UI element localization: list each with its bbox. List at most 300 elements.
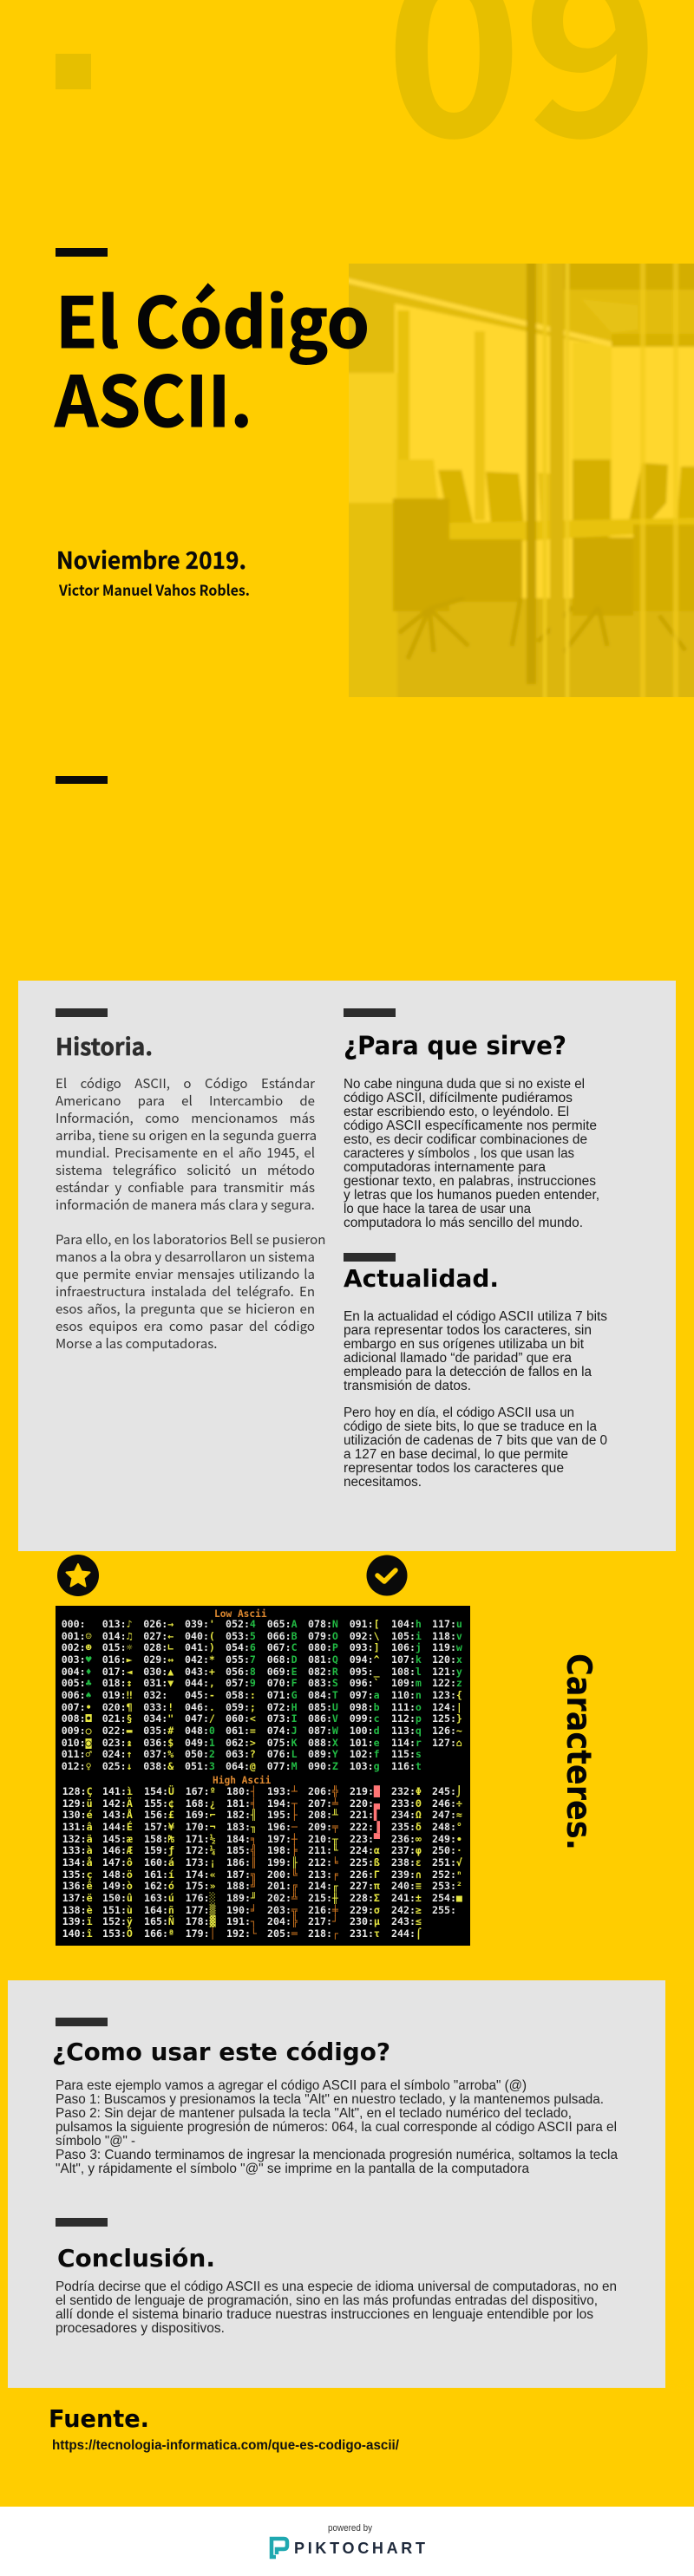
- text: actualidad: empleado para la detección de fallos en la: [344, 1365, 592, 1379]
- high ascii columns: 180:┤: [226, 1785, 257, 1797]
- high ascii columns: 156:£: [144, 1809, 174, 1821]
- high ascii columns: 241:±: [391, 1892, 422, 1904]
- high ascii columns: 220:▄: [350, 1797, 380, 1810]
- high ascii columns: 242:≥: [391, 1904, 422, 1916]
- text: para que sirve: esto, es decir codificar combinaciones de: [344, 1132, 587, 1147]
- low ascii columns: 100:d: [350, 1725, 380, 1737]
- low ascii columns: 125:}: [432, 1712, 462, 1725]
- heading: como usar: ¿Como usar este código?: [52, 2038, 390, 2066]
- high ascii columns: 151:ù: [102, 1904, 133, 1916]
- high ascii columns: 240:≡: [391, 1880, 422, 1892]
- low ascii columns: 096:`: [350, 1677, 380, 1689]
- text: historia: estándar y confiable para transmitir más: [56, 1178, 315, 1197]
- high ascii columns: 226:Γ: [350, 1868, 380, 1881]
- low ascii columns: 106:j: [391, 1641, 422, 1653]
- text: actualidad: código de siete bits, lo que se traduce en la: [344, 1419, 597, 1434]
- high ascii columns: 246:÷: [432, 1797, 462, 1810]
- low ascii columns: 102:f: [350, 1748, 380, 1760]
- text: como usar: símbolo "@" -: [56, 2134, 135, 2149]
- high ascii columns: 218:┌: [308, 1927, 338, 1940]
- low ascii columns: 108:l: [391, 1666, 422, 1678]
- text: historia: Americano para el Intercambio de: [56, 1092, 315, 1110]
- text: como usar: pulsamos la siguiente progresión de números: 064, la cual corresponde al código ASCII para el: [56, 2120, 617, 2135]
- heading: historia: Historia.: [56, 1028, 153, 1062]
- high ascii columns: 183:╖: [226, 1821, 257, 1833]
- conclusion bar: [56, 2218, 108, 2227]
- high ascii columns: 198:╞: [267, 1844, 298, 1856]
- text: para que sirve: código ASCII específicamente nos permite: [344, 1118, 597, 1133]
- high ascii columns: 160:á: [144, 1856, 174, 1868]
- low ascii columns: 041:): [185, 1641, 215, 1653]
- high ascii columns: 175:»: [186, 1880, 216, 1892]
- high ascii columns: 179:│: [186, 1927, 216, 1940]
- low ascii columns: 073:I: [267, 1712, 298, 1725]
- text: como usar: "Alt", y rápidamente el símbolo "@" se imprime en la pantalla de la computadora: [56, 2162, 529, 2176]
- low ascii columns: 057:9: [226, 1677, 256, 1689]
- high ascii columns: 225:ß: [350, 1856, 380, 1868]
- high ascii columns: 153:Ö: [102, 1927, 133, 1940]
- high ascii columns: 177:▒: [186, 1904, 216, 1916]
- high ascii columns: 244:⌠: [391, 1927, 422, 1940]
- text: como usar: Para este ejemplo vamos a agregar el código ASCII para el símbolo "arroba" (@): [56, 2078, 527, 2093]
- high ascii columns: 190:╛: [226, 1904, 257, 1916]
- low ascii columns: 026:→: [143, 1618, 174, 1630]
- low ascii columns: 012:♀: [62, 1760, 92, 1772]
- high ascii columns: 202:╩: [267, 1892, 298, 1904]
- low ascii columns: 051:3: [185, 1760, 215, 1772]
- low ascii columns: 008:◘: [62, 1712, 92, 1725]
- text: como usar: Paso 2: Sin dejar de mantener pulsada la tecla "Alt", en el teclado numérico del teclado,: [56, 2106, 572, 2121]
- icon: check: [366, 1555, 408, 1595]
- title: [54, 268, 370, 447]
- high ascii columns: 247:≈: [432, 1809, 462, 1821]
- low ascii columns: 010:◙: [62, 1737, 92, 1749]
- high ascii columns: 136:ê: [62, 1880, 93, 1892]
- high ascii columns: 181:╡: [226, 1797, 257, 1810]
- high ascii columns: 234:Ω: [391, 1809, 422, 1821]
- low ascii columns: 115:s: [391, 1748, 422, 1760]
- high ascii columns: 163:ú: [144, 1892, 174, 1904]
- high ascii columns: 171:½: [186, 1833, 216, 1845]
- low ascii columns: 118:v: [432, 1630, 462, 1642]
- high ascii columns: 228:Σ: [350, 1892, 380, 1904]
- low ascii columns: 004:♦: [62, 1666, 92, 1678]
- low ascii columns: 098:b: [350, 1701, 380, 1713]
- high ascii columns: 187:╗: [226, 1868, 257, 1881]
- high ascii columns: 204:╠: [267, 1915, 298, 1927]
- low ascii columns: 066:B: [267, 1630, 298, 1642]
- low ascii columns: 062:>: [226, 1737, 256, 1749]
- text: historia: esos años, la pregunta que se hicieron en: [56, 1300, 315, 1318]
- high ascii columns: 188:╝: [226, 1880, 257, 1892]
- low ascii columns: 122:z: [432, 1677, 462, 1689]
- high ascii columns: 192:└: [226, 1927, 257, 1940]
- low ascii columns: 029:↔: [143, 1653, 174, 1666]
- high ascii columns: 184:╕: [226, 1833, 257, 1845]
- high ascii columns: 232:Φ: [391, 1785, 422, 1797]
- high ascii columns: 237:φ: [391, 1844, 422, 1856]
- low ascii columns: 104:h: [391, 1618, 422, 1630]
- author: Victor Manuel Vahos Robles.: [58, 578, 250, 600]
- high ascii columns: 143:Å: [102, 1809, 133, 1821]
- high ascii columns: 139:ï: [62, 1915, 93, 1927]
- high ascii columns: 207:╧: [308, 1797, 338, 1810]
- low ascii columns: 063:?: [226, 1748, 256, 1760]
- low ascii label: Low Ascii: [214, 1608, 267, 1620]
- high ascii columns: 174:«: [186, 1868, 216, 1881]
- high ascii columns: 233:Θ: [391, 1797, 422, 1810]
- high ascii columns: 229:σ: [350, 1904, 380, 1916]
- high ascii columns: 182:╢: [226, 1809, 257, 1821]
- high ascii columns: 248:°: [432, 1821, 462, 1833]
- low ascii columns: [62, 1618, 462, 1772]
- low ascii columns: 024:↑: [102, 1748, 133, 1760]
- low ascii columns: 027:←: [143, 1630, 174, 1642]
- high ascii columns: 155:¢: [144, 1797, 174, 1810]
- low ascii columns: 005:♣: [62, 1677, 92, 1689]
- high ascii columns: 249:∙: [432, 1833, 462, 1845]
- low ascii columns: 023:↨: [102, 1737, 133, 1749]
- text: para que sirve: caracteres y símbolos , los que usan las: [344, 1146, 574, 1161]
- low ascii columns: 076:L: [267, 1748, 298, 1760]
- high ascii columns: 140:î: [62, 1927, 93, 1940]
- high ascii columns: 141:ì: [102, 1785, 133, 1797]
- low ascii columns: 097:a: [350, 1689, 380, 1701]
- high ascii columns: 165:Ñ: [144, 1915, 174, 1927]
- text: actualidad: embargo en sus orígenes utilizaba un bit: [344, 1337, 585, 1352]
- high ascii columns: 215:╫: [308, 1892, 338, 1904]
- low ascii columns: 056:8: [226, 1666, 256, 1678]
- low ascii columns: 126:~: [432, 1725, 462, 1737]
- high ascii columns: 208:╨: [308, 1809, 338, 1821]
- low ascii columns: 022:▬: [102, 1725, 133, 1737]
- powered by label: powered by: [328, 2523, 372, 2534]
- high ascii columns: 178:▓: [186, 1915, 216, 1927]
- low ascii columns: 110:n: [391, 1689, 422, 1701]
- low ascii columns: 003:♥: [62, 1653, 92, 1666]
- low ascii columns: 109:m: [391, 1677, 422, 1689]
- high ascii columns: 158:₧: [144, 1833, 174, 1845]
- high ascii columns: 135:ç: [62, 1868, 93, 1881]
- low ascii columns: 089:Y: [308, 1748, 338, 1760]
- high ascii columns: 239:∩: [391, 1868, 422, 1881]
- low ascii columns: 038:&: [143, 1760, 174, 1772]
- title: ASCII.: [54, 347, 252, 447]
- low ascii columns: 103:g: [350, 1760, 380, 1772]
- high ascii columns: 230:µ: [350, 1915, 380, 1927]
- text: como usar: Paso 1: Buscamos y presionamos la tecla "Alt" en nuestro teclado, y la mantenemos pulsada.: [56, 2092, 604, 2107]
- text: historia: sistema telegráfico solicitó un método: [56, 1161, 315, 1179]
- low ascii columns: 001:☺: [62, 1630, 92, 1642]
- low ascii columns: 049:1: [185, 1737, 215, 1749]
- high ascii columns: 245:⌡: [432, 1785, 462, 1797]
- high ascii columns: 172:¼: [186, 1844, 216, 1856]
- high ascii columns: 147:ô: [102, 1856, 133, 1868]
- footer band: [0, 2507, 694, 2576]
- para que sirve bar: [344, 1008, 396, 1017]
- low ascii columns: 059:;: [226, 1701, 256, 1713]
- low ascii columns: 021:§: [102, 1712, 133, 1725]
- high ascii columns: 222:▐: [350, 1821, 380, 1833]
- low ascii columns: 007:•: [62, 1701, 92, 1713]
- low ascii columns: 119:w: [432, 1641, 462, 1653]
- text: historia: manos a la obra y desarrollaron un sistema: [56, 1248, 315, 1266]
- text: actualidad: utilización de cadenas de 7 bits que van de 0: [344, 1433, 607, 1448]
- como usar bar: [56, 2018, 108, 2026]
- high ascii columns: 221:▌: [350, 1809, 380, 1821]
- low ascii columns: 085:U: [308, 1701, 338, 1713]
- low ascii columns: 015:☼: [102, 1641, 133, 1653]
- high ascii columns: 250:·: [432, 1844, 462, 1856]
- low ascii columns: 079:O: [308, 1630, 338, 1642]
- heading: fuente: Fuente.: [49, 2404, 149, 2433]
- high ascii columns: 223:▀: [350, 1833, 380, 1845]
- heading: conclusion: Conclusión.: [57, 2244, 215, 2273]
- source url: https://tecnologia-informatica.com/que-es-codigo-ascii/: [52, 2438, 400, 2453]
- text: historia: [56, 1074, 325, 1353]
- high ascii columns: 132:ä: [62, 1833, 93, 1845]
- text: actualidad: adicional llamado “de paridad” que era: [344, 1351, 572, 1366]
- text: como usar: [56, 2078, 618, 2176]
- high ascii columns: 146:Æ: [102, 1844, 133, 1856]
- low ascii columns: 090:Z: [308, 1760, 338, 1772]
- high ascii columns: 252:ⁿ: [432, 1868, 462, 1881]
- title: El Código: [56, 268, 370, 368]
- low ascii columns: 093:]: [350, 1641, 380, 1653]
- high ascii columns: 200:╚: [267, 1868, 298, 1881]
- high ascii columns: 199:╟: [267, 1856, 298, 1868]
- low ascii columns: 044:,: [185, 1677, 215, 1689]
- text: actualidad: a 127 en base decimal, lo que permite: [344, 1447, 568, 1462]
- text: conclusion: procesadores y dispositivos.: [56, 2321, 225, 2336]
- high ascii columns: 195:├: [267, 1809, 298, 1821]
- high ascii columns: 224:α: [350, 1844, 380, 1856]
- high ascii columns: 216:╪: [308, 1904, 338, 1916]
- low ascii columns: 094:^: [350, 1653, 380, 1666]
- low ascii columns: 019:‼: [102, 1689, 133, 1701]
- text: para que sirve: No cabe ninguna duda que si no existe el: [344, 1077, 585, 1092]
- high ascii columns: 152:ÿ: [102, 1915, 133, 1927]
- low ascii columns: 091:[: [350, 1618, 380, 1630]
- high ascii columns: 255:: [432, 1904, 456, 1916]
- high ascii columns: 129:ü: [62, 1797, 93, 1810]
- low ascii columns: 040:(: [185, 1630, 215, 1642]
- high ascii columns: 150:û: [102, 1892, 133, 1904]
- low ascii columns: 105:i: [391, 1630, 422, 1642]
- text: para que sirve: código ASCII, difícilmente pudiéramos: [344, 1091, 573, 1105]
- high ascii columns: 166:ª: [144, 1927, 174, 1940]
- text: para que sirve: y letras que los humanos pueden entender,: [344, 1188, 599, 1203]
- high ascii columns: 189:╜: [226, 1892, 257, 1904]
- low ascii columns: 095:_: [350, 1666, 380, 1678]
- text: historia: Información, como mencionamos más: [56, 1109, 315, 1127]
- high ascii columns: 209:╤: [308, 1821, 338, 1833]
- text: actualidad: representar todos los caracteres que: [344, 1461, 564, 1476]
- high ascii columns: 201:╔: [267, 1880, 298, 1892]
- low ascii columns: 031:▼: [143, 1677, 174, 1689]
- text: conclusion: Podría decirse que el código ASCII es una especie de idioma universal de computadoras, no en: [56, 2279, 617, 2294]
- high ascii columns: 194:┬: [267, 1797, 298, 1810]
- low ascii columns: 099:c: [350, 1712, 380, 1725]
- high ascii columns: 157:¥: [144, 1821, 174, 1833]
- low ascii columns: 052:4: [226, 1618, 256, 1630]
- text: actualidad: Pero hoy en día, el código ASCII usa un: [344, 1405, 574, 1420]
- low ascii columns: 092:\: [350, 1630, 380, 1642]
- low ascii columns: 084:T: [308, 1689, 338, 1701]
- low ascii columns: 033:!: [143, 1701, 174, 1713]
- low ascii columns: 123:{: [432, 1689, 462, 1701]
- text: para que sirve: [344, 1077, 599, 1230]
- high ascii columns: 212:╘: [308, 1856, 338, 1868]
- high ascii columns: 231:τ: [350, 1927, 380, 1940]
- low ascii columns: 011:♂: [62, 1748, 92, 1760]
- low ascii columns: 120:x: [432, 1653, 462, 1666]
- high ascii columns: 167:º: [186, 1785, 216, 1797]
- low ascii columns: 013:♪: [102, 1618, 133, 1630]
- panel: historia y para que sirve: [18, 981, 676, 1551]
- low ascii columns: 114:r: [391, 1737, 422, 1749]
- low ascii columns: 050:2: [185, 1748, 215, 1760]
- high ascii columns: 196:─: [267, 1821, 298, 1833]
- low ascii columns: 018:↕: [102, 1677, 133, 1689]
- high ascii columns: 170:¬: [186, 1821, 216, 1833]
- text: historia: que permite enviar mensajes utilizando la: [56, 1265, 315, 1283]
- icon: star: [57, 1555, 99, 1596]
- high ascii columns: 145:æ: [102, 1833, 133, 1845]
- low ascii columns: 017:◄: [102, 1666, 133, 1678]
- text: historia: mundial. Precisamente en el año 1945, el: [56, 1144, 315, 1162]
- low ascii columns: 124:|: [432, 1701, 462, 1713]
- low ascii columns: 111:o: [391, 1701, 422, 1713]
- text: actualidad: para representar todos los caracteres, sin: [344, 1323, 592, 1338]
- high ascii columns: 243:≤: [391, 1915, 422, 1927]
- low ascii columns: 016:►: [102, 1653, 133, 1666]
- high ascii columns: 186:║: [226, 1856, 257, 1868]
- low ascii columns: 036:$: [143, 1737, 174, 1749]
- low ascii columns: 009:○: [62, 1725, 92, 1737]
- low ascii columns: 060:<: [226, 1712, 256, 1725]
- low ascii columns: 067:C: [267, 1641, 298, 1653]
- high ascii columns: 162:ó: [144, 1880, 174, 1892]
- low ascii columns: 107:k: [391, 1653, 422, 1666]
- low ascii columns: 116:t: [391, 1760, 422, 1772]
- high ascii columns: 144:É: [102, 1821, 133, 1833]
- low ascii columns: 078:N: [308, 1618, 338, 1630]
- low ascii columns: 072:H: [267, 1701, 298, 1713]
- high ascii columns: 164:ñ: [144, 1904, 174, 1916]
- low ascii columns: 042:*: [185, 1653, 215, 1666]
- low ascii columns: 113:q: [391, 1725, 422, 1737]
- low ascii columns: 083:S: [308, 1677, 338, 1689]
- low ascii columns: 069:E: [267, 1666, 298, 1678]
- text: actualidad: necesitamos.: [344, 1475, 422, 1490]
- high ascii columns: 197:┼: [267, 1833, 298, 1845]
- high ascii columns: 131:â: [62, 1821, 93, 1833]
- text: para que sirve: lo que hace la tarea de usar una: [344, 1202, 531, 1216]
- low ascii columns: 071:G: [267, 1689, 298, 1701]
- low ascii columns: 037:%: [143, 1748, 174, 1760]
- low ascii columns: 006:♠: [62, 1689, 92, 1701]
- low ascii columns: 032:: [143, 1689, 167, 1701]
- text: historia: infraestructura instalada del telégrafo. En: [56, 1282, 315, 1301]
- low ascii columns: 025:↓: [102, 1760, 133, 1772]
- text: historia: información de manera más clara y segura.: [56, 1196, 315, 1214]
- high ascii columns: 227:π: [350, 1880, 380, 1892]
- historia bar: [56, 1008, 108, 1017]
- low ascii columns: 034:": [143, 1712, 174, 1725]
- low ascii columns: 047:/: [185, 1712, 215, 1725]
- actualidad bar: [344, 1253, 396, 1262]
- high ascii columns: 169:⌐: [186, 1809, 216, 1821]
- high ascii columns: 142:Ä: [102, 1797, 133, 1810]
- text: para que sirve: computadora lo más sencillo del mundo.: [344, 1216, 583, 1230]
- high ascii columns: 159:ƒ: [144, 1844, 174, 1856]
- low ascii columns: 117:u: [432, 1618, 462, 1630]
- text: historia: Para ello, en los laboratorios Bell se pusieron: [56, 1230, 325, 1249]
- high ascii columns: 191:┐: [226, 1915, 257, 1927]
- high ascii columns: 193:┴: [267, 1785, 298, 1797]
- piktochart wordmark: PIKTOCHART: [294, 2540, 425, 2557]
- text: actualidad: [344, 1309, 607, 1490]
- text: conclusion: [56, 2279, 617, 2336]
- high ascii columns: 154:Ü: [144, 1785, 174, 1797]
- high ascii columns: 128:Ç: [62, 1785, 93, 1797]
- low ascii columns: 053:5: [226, 1630, 256, 1642]
- date: Noviembre 2019.: [56, 542, 246, 576]
- high ascii columns: 214:╓: [308, 1880, 338, 1892]
- text: historia: El código ASCII, o Código Estándar: [56, 1074, 315, 1092]
- high ascii columns: 206:╬: [308, 1785, 338, 1797]
- text: actualidad: transmisión de datos.: [344, 1379, 471, 1393]
- high ascii columns: 138:è: [62, 1904, 93, 1916]
- high ascii columns: 185:╣: [226, 1844, 257, 1856]
- low ascii columns: 088:X: [308, 1737, 338, 1749]
- low ascii columns: 035:#: [143, 1725, 174, 1737]
- low ascii columns: 064:@: [226, 1760, 256, 1772]
- high ascii columns: 134:å: [62, 1856, 93, 1868]
- low ascii columns: 127:⌂: [432, 1737, 462, 1749]
- high ascii columns: 217:┘: [308, 1915, 338, 1927]
- high ascii columns: 210:╥: [308, 1833, 338, 1845]
- low ascii columns: 070:F: [267, 1677, 298, 1689]
- heading: para que sirve: ¿Para que sirve?: [344, 1031, 566, 1060]
- text: como usar: Paso 3: Cuando terminamos de ingresar la mencionada progresión numérica, soltamos la tecla: [56, 2148, 618, 2162]
- rotated heading: caracteres: Caracteres.: [559, 1653, 598, 1850]
- icon: piktochart logo: [272, 2539, 287, 2557]
- low ascii columns: 112:p: [391, 1712, 422, 1725]
- low ascii columns: 028:∟: [143, 1641, 174, 1653]
- low ascii columns: 045:-: [185, 1689, 215, 1701]
- high ascii columns: 149:ò: [102, 1880, 133, 1892]
- chart: ASCII table screenshot: [56, 1606, 470, 1946]
- text: historia: Morse a las computadoras.: [56, 1334, 217, 1353]
- text: conclusion: allí donde el sistema binario traduce nuestras instrucciones en lenguaje entendible por los: [56, 2307, 593, 2322]
- high ascii columns: 211:╙: [308, 1844, 338, 1856]
- high ascii columns: 173:¡: [186, 1856, 216, 1868]
- low ascii columns: 121:y: [432, 1666, 462, 1678]
- high ascii columns: 235:δ: [391, 1821, 422, 1833]
- high ascii columns: 219:█: [350, 1785, 380, 1797]
- high ascii columns: [62, 1785, 462, 1940]
- high ascii columns: 176:░: [186, 1892, 216, 1904]
- high ascii columns: 130:é: [62, 1809, 93, 1821]
- low ascii columns: 043:+: [185, 1666, 215, 1678]
- low ascii columns: 054:6: [226, 1641, 256, 1653]
- panel: como usar y conclusion: [8, 1980, 665, 2388]
- low ascii columns: 074:J: [267, 1725, 298, 1737]
- high ascii columns: 238:ε: [391, 1856, 422, 1868]
- high ascii columns: 133:à: [62, 1844, 93, 1856]
